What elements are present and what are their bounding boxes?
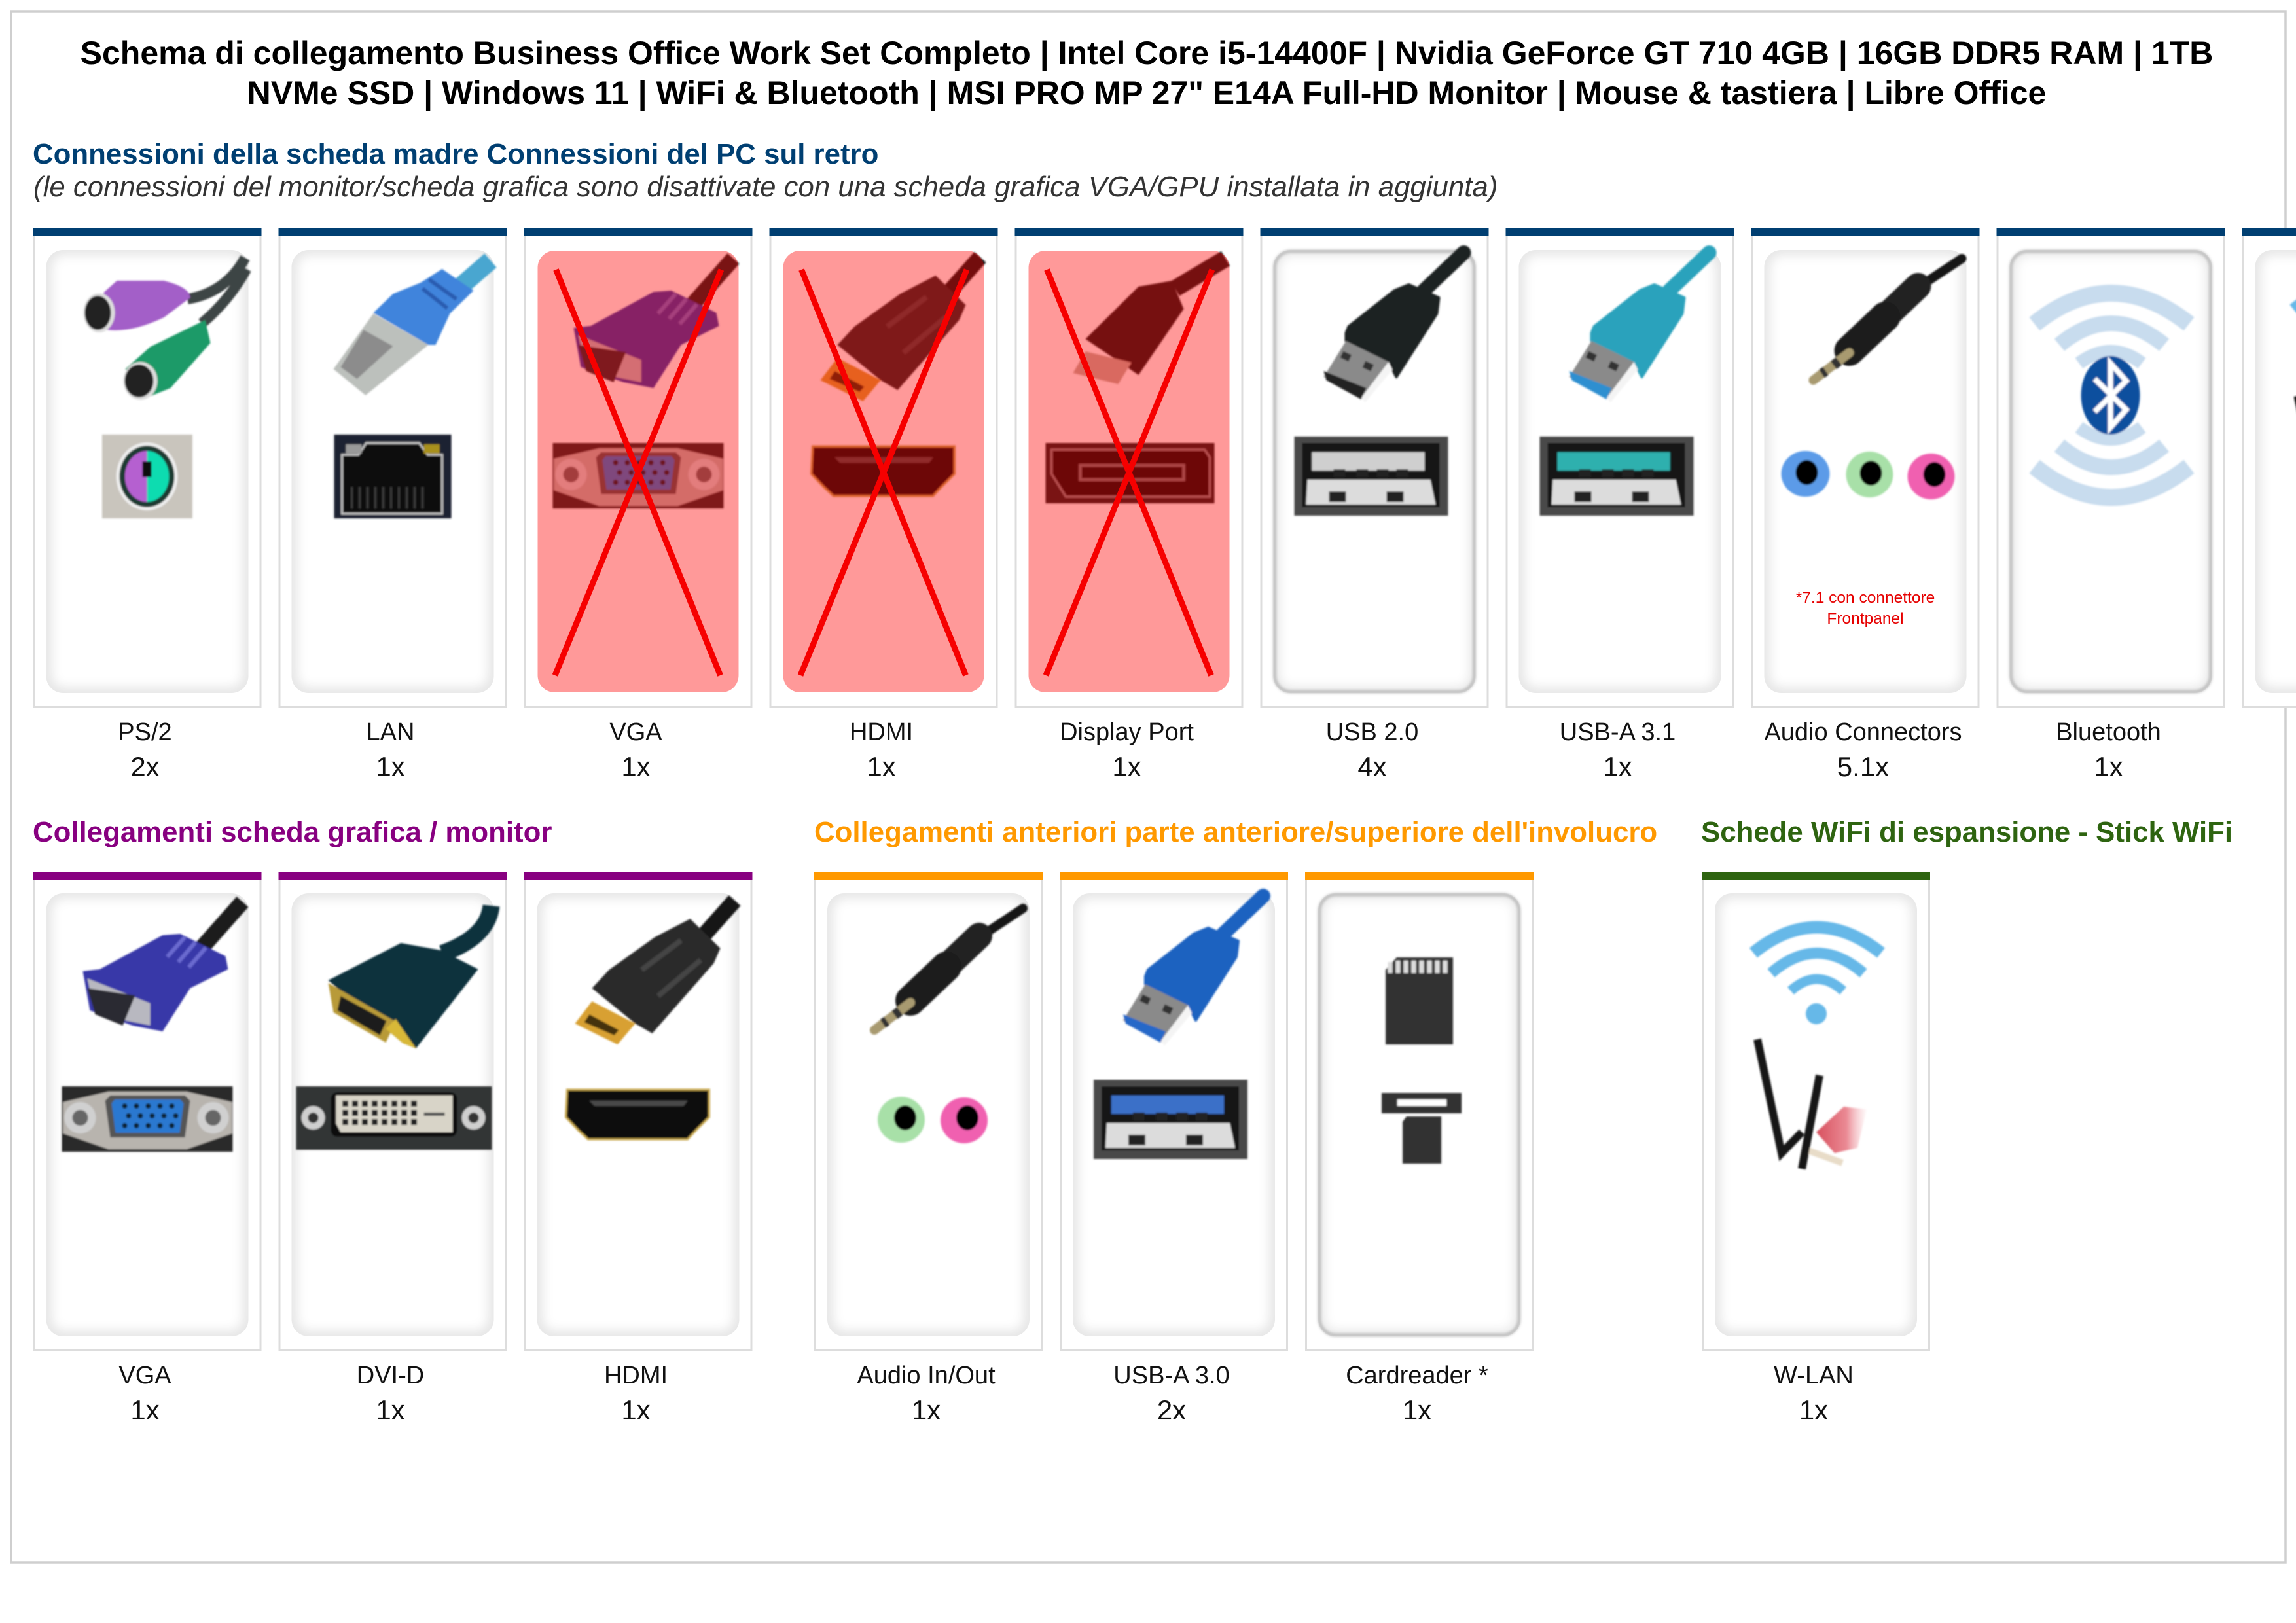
label xyxy=(1764,719,1962,782)
icon: USB plug xyxy=(1570,253,1710,402)
card: Cardreader xyxy=(1305,872,1534,1425)
card: USB-A 3.1 xyxy=(1505,228,1734,782)
card: DVI-D xyxy=(279,872,507,1425)
icon: audio jack xyxy=(1813,259,1962,380)
label xyxy=(1560,719,1676,782)
label xyxy=(1774,1362,1854,1425)
card: W-LAN xyxy=(1702,872,1930,1425)
icon: SD card xyxy=(1386,957,1453,1044)
icon: LAN plug xyxy=(334,260,491,395)
label: HDMI xyxy=(604,1362,668,1389)
icon: LAN port xyxy=(334,435,452,518)
label xyxy=(1346,1362,1488,1425)
icon: USB port xyxy=(1094,1080,1247,1159)
disabled overlay with red cross xyxy=(783,251,984,692)
icon: VGA port xyxy=(552,443,724,508)
panel xyxy=(1518,250,1721,693)
icon: VGA port xyxy=(62,1086,233,1152)
panel xyxy=(292,893,493,1336)
icon: DVI port xyxy=(296,1086,492,1150)
label: 1x xyxy=(2094,751,2123,782)
label: DVI-D xyxy=(357,1362,424,1389)
label: Display Port xyxy=(1060,719,1194,746)
icon: USB port xyxy=(1539,437,1694,516)
label: 2x xyxy=(130,751,160,782)
label xyxy=(118,719,172,782)
panel xyxy=(1073,893,1275,1336)
label xyxy=(604,1362,668,1425)
label: 1x xyxy=(867,751,896,782)
label: USB-A 3.0 xyxy=(1113,1362,1230,1389)
panel xyxy=(1274,250,1475,693)
label xyxy=(609,719,662,782)
icon: Display Port plug xyxy=(1073,259,1225,384)
icon: VGA plug xyxy=(82,902,242,1031)
label: Bluetooth xyxy=(2056,719,2161,746)
panel xyxy=(2009,250,2212,693)
panel xyxy=(46,893,249,1336)
icon: Display Port port xyxy=(1046,443,1215,503)
panel xyxy=(2255,250,2296,693)
icon: PS/2 plugs xyxy=(84,258,246,400)
label: Audio In/Out xyxy=(857,1362,996,1389)
label xyxy=(1060,719,1194,782)
icon: VGA plug xyxy=(573,259,733,388)
label xyxy=(850,719,913,782)
disabled overlay with red cross xyxy=(538,251,738,692)
panel xyxy=(1765,250,1966,693)
panel xyxy=(46,250,249,693)
label: Audio Connectors xyxy=(1764,719,1962,746)
icon: USB plug xyxy=(1323,253,1463,402)
icon: USB plug xyxy=(1123,896,1263,1046)
label: Cardreader * xyxy=(1346,1362,1488,1389)
title xyxy=(81,35,2213,112)
panel xyxy=(292,250,493,693)
card: USB 2.0 xyxy=(1261,228,1488,782)
card: Display Port (disabled) xyxy=(1014,228,1244,782)
icon: PS/2 port xyxy=(102,435,192,518)
label: PS/2 xyxy=(118,719,172,746)
label: 1x xyxy=(376,1395,405,1425)
label: 1x xyxy=(912,1395,941,1425)
icon: HDMI port xyxy=(565,1090,709,1139)
card: Audio In/Out xyxy=(814,872,1043,1425)
label: 1x xyxy=(376,751,405,782)
label: USB 2.0 xyxy=(1326,719,1418,746)
label xyxy=(367,719,414,782)
icon: HDMI plug xyxy=(821,257,980,401)
panel xyxy=(538,251,738,692)
icon: HDMI plug xyxy=(575,901,734,1044)
label: 5.1x xyxy=(1837,751,1889,782)
label: VGA xyxy=(118,1362,171,1389)
label: 1x xyxy=(1603,751,1632,782)
label: W-LAN xyxy=(1774,1362,1854,1389)
disabled overlay with red cross xyxy=(1029,251,1229,692)
label: 4x xyxy=(1357,751,1387,782)
label xyxy=(1326,719,1418,782)
card: LAN xyxy=(279,228,507,782)
label: VGA xyxy=(609,719,662,746)
card: HDMI monitor xyxy=(524,872,753,1425)
label: 1x xyxy=(130,1395,160,1425)
label xyxy=(357,1362,424,1425)
icon: audio sockets xyxy=(878,1097,988,1143)
card: HDMI (disabled) xyxy=(770,228,997,782)
card: W-LAN (cut off at page edge) xyxy=(2242,228,2296,707)
icon: card slot xyxy=(1382,1093,1462,1164)
heading: graphics card: Collegamenti scheda grafica / monitor xyxy=(33,816,552,848)
label xyxy=(1113,1362,1230,1425)
note: 7.1: *7.1 con connettore xyxy=(1796,589,1935,607)
label: HDMI xyxy=(850,719,913,746)
label: 1x xyxy=(621,751,651,782)
label: LAN xyxy=(367,719,414,746)
panel xyxy=(783,251,984,692)
icon: Bluetooth xyxy=(2034,293,2189,497)
card: Bluetooth xyxy=(1996,228,2225,782)
label: USB-A 3.1 xyxy=(1560,719,1676,746)
panel xyxy=(1318,893,1520,1336)
panel xyxy=(1715,893,1917,1336)
note: 7.1 xyxy=(1796,589,1935,628)
card: VGA monitor xyxy=(33,872,262,1425)
title: NVMe SSD | Windows 11 | WiFi & Bluetooth | MSI PRO MP 27" E14A Full-HD Monitor | Mouse & tastiera | Libre Office xyxy=(247,75,2046,112)
label xyxy=(857,1362,996,1425)
label xyxy=(118,1362,171,1425)
panel xyxy=(537,893,740,1336)
icon: HDMI port xyxy=(812,446,954,496)
panel xyxy=(827,893,1030,1336)
heading: motherboard connections: Connessioni della scheda madre Connessioni del PC sul retro xyxy=(33,138,878,170)
label: 1x xyxy=(1403,1395,1431,1425)
label: 2x xyxy=(1157,1395,1186,1425)
icon: wifi and antenna xyxy=(2293,284,2296,526)
title: Schema di collegamento Business Office Work Set Completo | Intel Core i5-14400F | Nvidia GeForce GT 710 4GB | 16GB DDR5 RAM | 1TB xyxy=(81,35,2213,72)
icon: DVI plug xyxy=(329,906,491,1048)
note: disabled connections: (le connessioni del monitor/scheda grafica sono disattivate con una scheda grafica VGA/GPU installata in aggiunta) xyxy=(33,171,1498,203)
icon: audio jack xyxy=(874,908,1023,1030)
card: Audio Connectors xyxy=(1751,228,1979,782)
label xyxy=(2056,719,2161,782)
icon: wifi and antenna xyxy=(1753,927,1881,1169)
panel xyxy=(1029,251,1229,692)
heading: wifi: Schede WiFi di espansione - Stick WiFi xyxy=(1701,816,2233,848)
label: 1x xyxy=(1112,751,1141,782)
card: USB-A 3.0 xyxy=(1060,872,1288,1425)
icon: USB port xyxy=(1295,437,1448,516)
label: 1x xyxy=(1799,1395,1828,1425)
note: 7.1: Frontpanel xyxy=(1827,610,1904,628)
card: PS/2 xyxy=(33,228,262,782)
icon: audio sockets xyxy=(1782,451,1954,499)
heading: front connections: Collegamenti anteriori parte anteriore/superiore dell'involucro xyxy=(814,816,1657,848)
label: 1x xyxy=(621,1395,651,1425)
card: VGA (disabled) xyxy=(524,228,753,782)
